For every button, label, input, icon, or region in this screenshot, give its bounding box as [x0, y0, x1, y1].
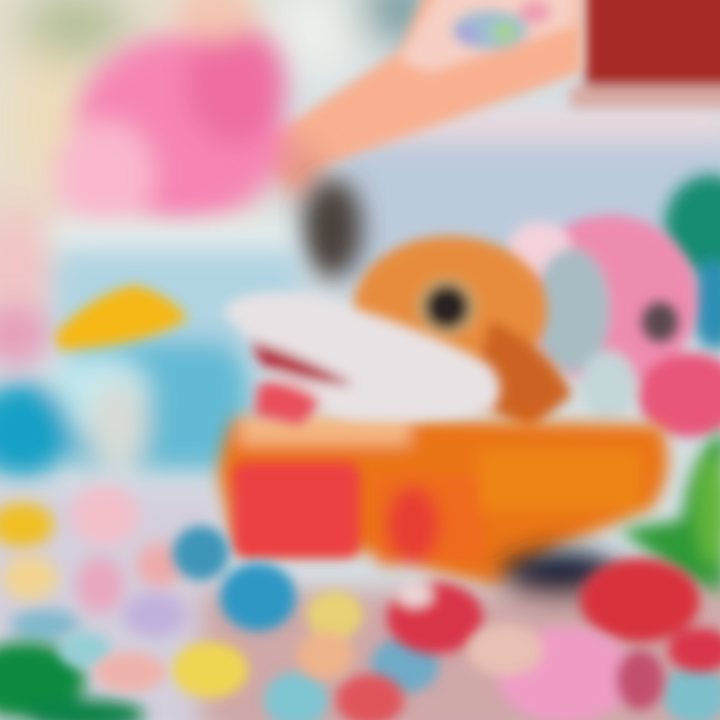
blue duck body	[0, 222, 300, 478]
red candies	[336, 558, 720, 720]
dark shadow behind figure	[302, 178, 362, 278]
green disc at right	[665, 175, 720, 350]
toy eye	[417, 278, 477, 336]
wall: blue-grey	[340, 112, 720, 290]
candy pile	[0, 485, 720, 720]
yellow candies	[94, 591, 363, 698]
left candies	[0, 485, 187, 641]
creature body	[508, 215, 720, 437]
orange toy head	[353, 236, 572, 430]
pink creature	[508, 215, 720, 437]
green leaf	[620, 430, 720, 610]
green foliage bottom left	[0, 642, 145, 720]
pink candies	[467, 624, 664, 720]
blue candies	[59, 526, 720, 720]
pastel base	[0, 490, 720, 720]
yellow duck beak	[55, 285, 188, 350]
white shark snout	[222, 292, 500, 425]
pink shirt figure	[55, 0, 322, 230]
orange box	[219, 415, 668, 590]
salmon window sill	[258, 0, 582, 180]
red roof top right	[570, 0, 720, 108]
red panel on box	[232, 462, 360, 558]
background: pale upper left	[0, 0, 430, 340]
creature eye	[642, 302, 678, 342]
